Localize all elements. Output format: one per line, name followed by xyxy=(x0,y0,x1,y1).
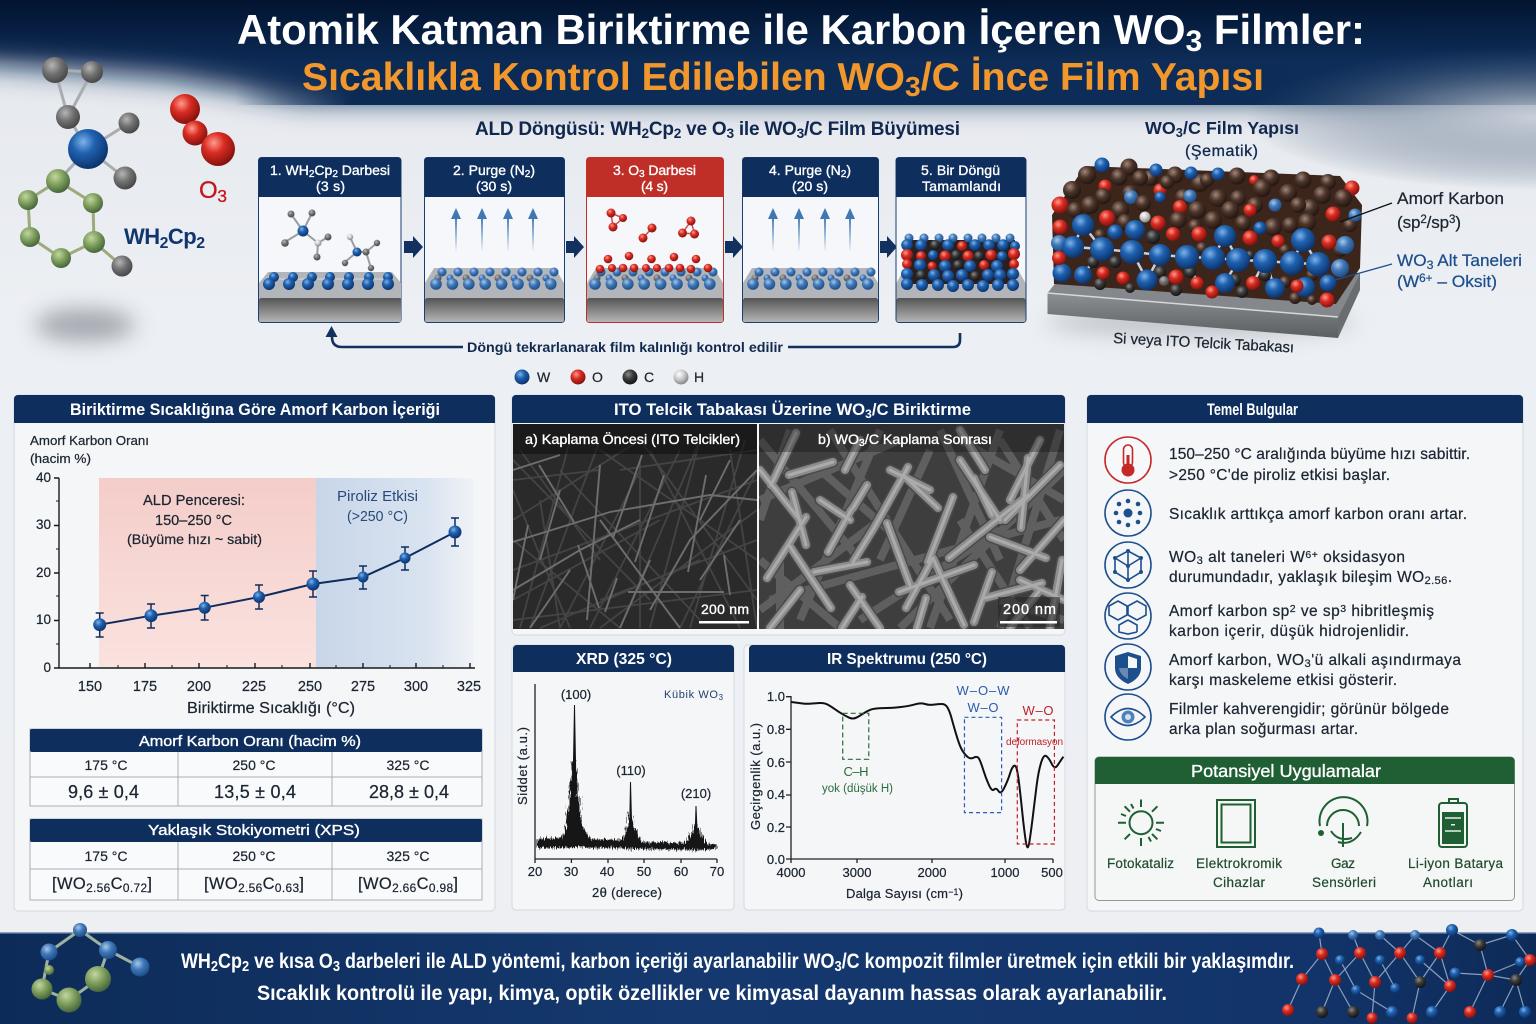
step 2 xyxy=(424,158,564,322)
IR chart: 3000 xyxy=(843,865,871,880)
IR chart: 0.2 xyxy=(767,820,785,835)
IR chart xyxy=(748,683,1063,901)
finding 5: Amorf karbon, WO3'ü alkali aşındırmaya xyxy=(1169,652,1461,670)
arrow: step 3 to 4 xyxy=(725,236,743,258)
IR chart: 0.8 xyxy=(767,722,785,737)
label: electrochromic: Elektrokromik xyxy=(1196,856,1282,871)
substrate label: Si veya ITO Telcik Tabakası xyxy=(1113,330,1294,356)
line chart: 175 xyxy=(133,679,157,695)
scale bar a xyxy=(699,604,749,624)
label: battery: Li-iyon Batarya xyxy=(1408,856,1503,871)
step 5: Tamamlandı xyxy=(922,178,1001,194)
film body with atoms xyxy=(1051,158,1362,308)
legend: atoms: O xyxy=(592,369,603,385)
icon: gas sensor xyxy=(1318,797,1367,847)
finding 2: Sıcaklık arttıkça amorf karbon oranı artar. xyxy=(1169,506,1467,523)
heading: ALD cycle: ALD Döngüsü: WH2Cp2 ve O3 ile WO3/C Film Büyümesi xyxy=(475,119,960,141)
step 2: 2. Purge (N2) xyxy=(453,162,535,180)
IR chart: 2000 xyxy=(918,865,946,880)
arrow: step 1 to 2 xyxy=(404,236,423,258)
XRD chart: 50 xyxy=(637,864,651,879)
icon: eye xyxy=(1105,694,1151,740)
top banner background xyxy=(0,0,1536,192)
table: amorphous carbon ratio xyxy=(30,729,482,806)
step 2: (30 s) xyxy=(476,178,512,194)
label a: a) Kaplama Öncesi (ITO Telcikler) xyxy=(525,430,740,447)
IR chart: 0.6 xyxy=(767,755,785,770)
panel: amorphous carbon content xyxy=(14,395,495,911)
label b: b) WO3/C Kaplama Sonrası xyxy=(818,431,992,449)
table: amorphous carbon ratio: 250 °C xyxy=(233,757,275,773)
loop arrow and caption: Döngü tekrarlanarak film kalınlığı kontrol edilir xyxy=(467,339,784,355)
label: gas sensors: Gaz xyxy=(1331,856,1355,871)
title: Atomik Katman Biriktirme ile Karbon İçeren WO 3 Filmler: xyxy=(237,6,1365,58)
line chart: (hacim %) xyxy=(30,451,91,466)
finding 6: Filmler kahverengidir; görünür bölgede xyxy=(1169,701,1449,718)
panel heading: Biriktirme Sıcaklığına Göre Amorf Karbon İçeriği xyxy=(70,401,440,419)
panel: key findings xyxy=(1087,395,1523,911)
panel: ITO nanowire deposition xyxy=(512,395,1065,635)
XRD heading: XRD (325 °C) xyxy=(576,651,672,668)
XRD chart: (210) xyxy=(681,786,711,801)
table: stoichiometry: [WO2.56C0.63] xyxy=(204,875,304,895)
label: battery: Anotları xyxy=(1423,875,1473,890)
legend: atoms xyxy=(514,369,704,385)
icon: sun xyxy=(1118,800,1164,846)
IR chart: 4000 xyxy=(777,865,805,880)
XRD chart: 2θ (derece) xyxy=(592,885,662,900)
step 5 xyxy=(896,158,1026,322)
applications heading xyxy=(1095,757,1514,784)
IR chart: deformasyon xyxy=(1006,737,1063,748)
label: electrochromic xyxy=(1196,856,1282,890)
scale bar a: 200 nm xyxy=(701,601,749,617)
finding 4: karbon içerir, düşük hidrojenlidir. xyxy=(1169,623,1409,640)
IR chart: C–H xyxy=(844,764,868,779)
panel heading xyxy=(14,395,495,423)
table: stoichiometry: [WO2.56C0.72] xyxy=(52,875,152,895)
table: amorphous carbon ratio: 9,6 ± 0,4 xyxy=(68,782,139,802)
finding 3: WO3 alt taneleri W6+ oksidasyon xyxy=(1169,549,1405,567)
label: WH2Cp2: WH2Cp2 xyxy=(124,224,205,252)
footer lattice right xyxy=(1282,924,1536,1024)
line chart: 150 xyxy=(78,679,102,695)
table: amorphous carbon ratio: 28,8 ± 0,4 xyxy=(369,782,449,802)
label: photocatalysis: Fotokataliz xyxy=(1107,856,1174,871)
panel heading xyxy=(512,395,1065,423)
XRD chart: Kübik WO3 xyxy=(664,689,724,702)
label: gas sensors xyxy=(1312,856,1376,890)
icon: shield xyxy=(1105,644,1151,690)
table: stoichiometry: 175 °C xyxy=(85,848,127,864)
IR chart: 0.0 xyxy=(767,852,785,867)
line chart xyxy=(30,433,481,717)
table: amorphous carbon ratio: 175 °C xyxy=(85,757,127,773)
XRD heading xyxy=(513,645,734,672)
line chart: Piroliz Etkisi xyxy=(337,488,418,505)
finding 4: Amorf karbon sp2 ve sp3 hibritleşmiş xyxy=(1169,603,1434,620)
step 1: (3 s) xyxy=(316,178,345,194)
XRD chart: (100) xyxy=(561,687,591,702)
line chart: 30 xyxy=(36,517,51,532)
table: stoichiometry: 250 °C xyxy=(233,848,275,864)
IR chart: 1.0 xyxy=(767,689,785,704)
icon: carbon rings xyxy=(1105,593,1151,639)
SEM image a xyxy=(513,424,757,629)
line chart: 150–250 °C xyxy=(155,513,232,529)
callout: WO3 subgrains: WO3 Alt Taneleri xyxy=(1397,251,1522,272)
title xyxy=(237,6,1365,102)
film title: (Şematik) xyxy=(1185,143,1258,160)
table: stoichiometry: Yaklaşık Stokiyometri (XPS) xyxy=(148,822,360,839)
title: Sıcaklıkla Kontrol Edilebilen WO3/C İnce Film Yapısı xyxy=(302,56,1264,102)
IR chart: 1000 xyxy=(991,865,1019,880)
XRD chart xyxy=(515,684,724,900)
step 1: 1. WH2Cp2 Darbesi xyxy=(270,162,390,180)
XRD chart: Siddet (a.u.) xyxy=(515,727,530,805)
footer molecule left xyxy=(32,923,150,1012)
icon: battery xyxy=(1439,799,1467,847)
XRD chart: 70 xyxy=(710,864,724,879)
line chart: Amorf Karbon Oranı xyxy=(30,433,149,448)
IR chart: yok (düşük H) xyxy=(822,783,893,795)
IR chart: Geçirgenlik (a.u.) xyxy=(748,723,763,830)
panel: XRD xyxy=(512,645,734,910)
legend: atoms: W xyxy=(537,369,551,385)
IR chart: 500 xyxy=(1041,865,1063,880)
line chart: 325 xyxy=(457,679,481,695)
table: stoichiometry xyxy=(30,819,482,900)
callout: amorphous carbon: (sp2/sp3) xyxy=(1397,213,1461,232)
applications heading: Potansiyel Uygulamalar xyxy=(1191,761,1381,781)
icon: crystal cube xyxy=(1105,542,1151,588)
film title xyxy=(1145,118,1299,160)
scale bar b xyxy=(998,597,1060,627)
panel heading: Temel Bulgular xyxy=(1207,401,1298,419)
line chart: 10 xyxy=(36,612,51,627)
step 3 xyxy=(586,158,724,322)
molecule: WH2Cp2 xyxy=(18,57,205,341)
label: electrochromic: Cihazlar xyxy=(1213,875,1266,890)
line chart: 275 xyxy=(351,679,375,695)
panel: IR spectrum xyxy=(744,645,1065,910)
finding 3: durumundadır, yaklaşık bileşim WO2.56. xyxy=(1169,569,1452,587)
step 4: 4. Purge (N2) xyxy=(769,162,851,180)
IR chart: W–O–W xyxy=(956,683,1010,698)
finding 4 xyxy=(1169,603,1434,640)
label: gas sensors: Sensörleri xyxy=(1312,875,1376,890)
XRD chart: 30 xyxy=(564,864,578,879)
line chart: 300 xyxy=(404,679,428,695)
scale bar b: 200 nm xyxy=(1003,602,1056,618)
line chart: 225 xyxy=(242,679,266,695)
footer band xyxy=(0,923,1536,1024)
step 3: (4 s) xyxy=(641,178,668,194)
molecule: O3 xyxy=(170,94,235,206)
table: amorphous carbon ratio: 13,5 ± 0,4 xyxy=(214,782,296,802)
table: amorphous carbon ratio: 325 °C xyxy=(387,757,429,773)
footer text xyxy=(181,950,1294,1005)
finding 6 xyxy=(1169,701,1449,738)
arrow: step 4 to 5 xyxy=(880,236,897,258)
finding 1 xyxy=(1169,446,1470,484)
IR chart: W–O xyxy=(968,700,998,715)
line chart: 20 xyxy=(36,565,51,580)
finding 1: >250 °C'de piroliz etkisi başlar. xyxy=(1169,467,1390,484)
IR chart: 0.4 xyxy=(767,787,785,802)
footer text: WH2Cp2 ve kısa O3 darbeleri ile ALD yöntemi, karbon içeriği ayarlanabilir WO3/C kompozit filmler üretmek için etkili bir yaklaşımdır. xyxy=(181,950,1294,975)
step 4 xyxy=(742,158,878,322)
SEM image b xyxy=(759,424,1064,630)
film title: WO3/C Film Yapısı xyxy=(1145,118,1299,140)
finding 5: karşı maskeleme etkisi gösterir. xyxy=(1169,672,1397,689)
table: amorphous carbon ratio: Amorf Karbon Oranı (hacim %) xyxy=(139,733,361,750)
icon: electrochromic tablet xyxy=(1217,800,1255,847)
step 5: 5. Bir Döngü xyxy=(921,162,1000,178)
panel heading xyxy=(1087,395,1523,423)
box: potential applications xyxy=(1095,757,1514,900)
line chart: 200 xyxy=(187,679,211,695)
step 4: (20 s) xyxy=(792,178,828,194)
finding 5 xyxy=(1169,652,1461,689)
XRD chart: 20 xyxy=(528,864,542,879)
line chart: ALD Penceresi: xyxy=(143,493,245,509)
XRD chart: 60 xyxy=(674,864,688,879)
finding 3 xyxy=(1169,549,1452,587)
line chart: (>250 °C) xyxy=(347,508,408,525)
line chart: Biriktirme Sıcaklığı (°C) xyxy=(187,700,355,717)
footer text: Sıcaklık kontrolü ile yapı, kimya, optik özellikler ve kimyasal dayanım hassas olarak ayarlanabilir. xyxy=(257,982,1167,1005)
callout: amorphous carbon xyxy=(1340,189,1504,232)
panel heading: ITO Telcik Tabakası Üzerine WO3/C Biriktirme xyxy=(614,400,971,421)
table: stoichiometry: [WO2.66C0.98] xyxy=(358,875,458,895)
callout: WO3 subgrains: (W6+ – Oksit) xyxy=(1397,272,1497,291)
table: stoichiometry: 325 °C xyxy=(387,848,429,864)
label: battery xyxy=(1408,856,1503,890)
legend: atoms: H xyxy=(694,369,704,385)
finding 1: 150–250 °C aralığında büyüme hızı sabittir. xyxy=(1169,446,1470,463)
IR heading xyxy=(749,645,1065,672)
legend: atoms: C xyxy=(644,369,654,385)
XRD chart: 40 xyxy=(600,864,614,879)
substrate block xyxy=(1045,270,1360,338)
finding 6: arka plan soğurması artar. xyxy=(1169,721,1358,738)
loop arrow and caption xyxy=(326,326,960,355)
step 1 xyxy=(258,158,401,322)
callout: amorphous carbon: Amorf Karbon xyxy=(1397,189,1504,208)
line chart: 250 xyxy=(298,679,322,695)
line chart: 0 xyxy=(43,660,51,675)
IR heading: IR Spektrumu (250 °C) xyxy=(827,651,987,668)
icon: particles xyxy=(1105,490,1151,536)
film structure schematic xyxy=(1045,118,1522,356)
IR chart: Dalga Sayısı (cm−1) xyxy=(846,886,963,901)
XRD chart: (110) xyxy=(616,763,646,778)
step 3: 3. O3 Darbesi xyxy=(613,162,696,180)
callout: WO3 subgrains xyxy=(1335,251,1522,291)
label: O3: O3 xyxy=(199,177,227,206)
line chart: 40 xyxy=(36,470,51,485)
line chart: (Büyüme hızı ~ sabit) xyxy=(127,531,262,547)
arrow: step 2 to 3 xyxy=(566,236,584,258)
icon: thermometer xyxy=(1105,437,1151,483)
IR chart: W–O xyxy=(1022,703,1054,718)
